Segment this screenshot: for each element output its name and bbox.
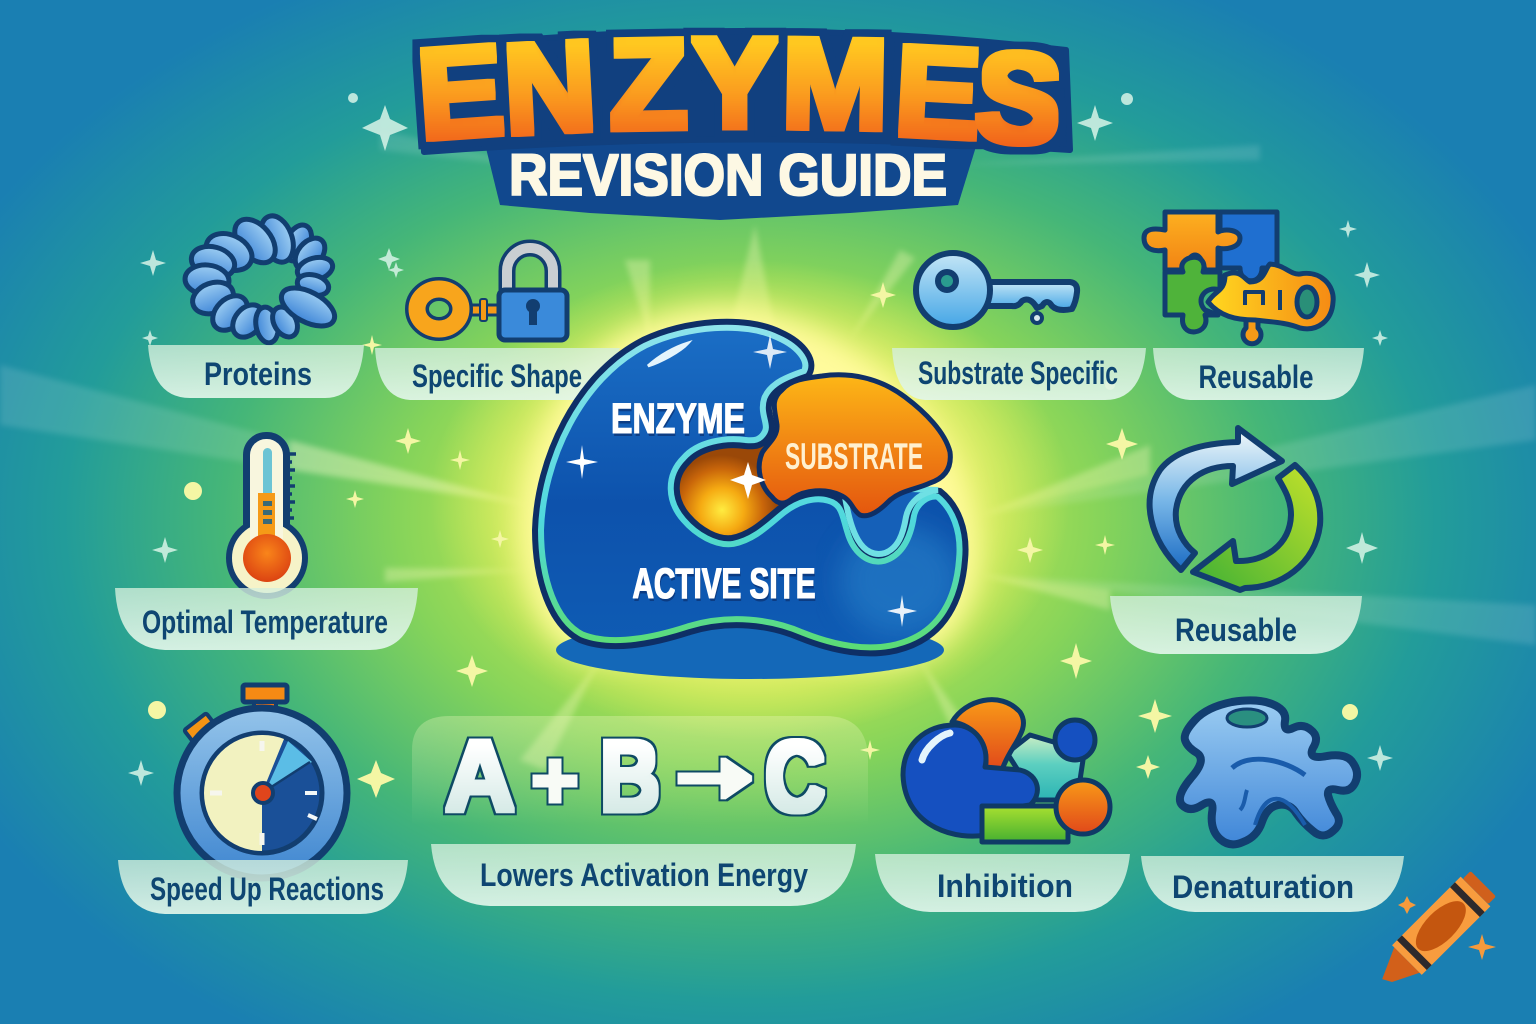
sparkles bbox=[128, 93, 1393, 786]
equation bbox=[445, 721, 825, 833]
shadow bbox=[556, 621, 944, 679]
icon: inhibition bbox=[903, 700, 1110, 842]
label: Speed Up Reactions bbox=[118, 860, 408, 914]
label: Reusable top bbox=[1153, 348, 1364, 400]
label: Specific Shape: Specific Shape bbox=[412, 358, 582, 394]
label: Speed Up Reactions: Speed Up Reactions bbox=[150, 871, 384, 907]
icon: protein coil bbox=[184, 211, 341, 345]
subtitle: REVISION GUIDE bbox=[509, 143, 947, 208]
central enzyme diagram bbox=[535, 322, 966, 679]
label: Optimal Temperature: Optimal Temperature bbox=[142, 604, 388, 640]
near-centre rays bbox=[290, 225, 1150, 780]
enzyme rim bbox=[535, 322, 966, 653]
icon: denatured splat bbox=[1180, 700, 1357, 844]
label: Reusable top: Reusable bbox=[1198, 359, 1314, 395]
substrate bbox=[759, 375, 950, 516]
panel backing bbox=[412, 716, 868, 825]
enzyme outline bbox=[535, 322, 966, 653]
reaction panel bbox=[412, 716, 868, 833]
icon: recycle arrows bbox=[1150, 428, 1320, 590]
icon: crayon bbox=[1370, 869, 1498, 997]
lock shackle bbox=[507, 248, 553, 295]
label: Proteins: Proteins bbox=[204, 356, 312, 392]
label: Lowers Activation Energy: Lowers Activation Energy bbox=[480, 857, 808, 893]
label: Proteins bbox=[148, 345, 364, 398]
title word: ENZYMES bbox=[413, 12, 1066, 173]
light rays bbox=[0, 130, 1536, 645]
equation: A bbox=[445, 721, 515, 833]
central glow bbox=[430, 260, 1070, 740]
arrow bbox=[680, 760, 750, 797]
icon: stopwatch bbox=[177, 685, 347, 878]
label: Denaturation bbox=[1141, 856, 1404, 912]
label: Substrate Specific bbox=[892, 348, 1146, 400]
label: Optimal Temperature bbox=[115, 588, 418, 650]
sparkles on enzyme bbox=[566, 335, 917, 627]
icon: thermometer bbox=[229, 435, 305, 596]
label: Reusable middle bbox=[1110, 596, 1362, 654]
active site bbox=[677, 440, 800, 538]
label: enzyme: ENZYME bbox=[611, 395, 745, 443]
label: Inhibition bbox=[875, 854, 1130, 912]
title bbox=[413, 12, 1070, 220]
pocket under substrate bbox=[845, 488, 938, 554]
label: Lowers Activation Energy bbox=[431, 844, 856, 906]
equation: B bbox=[600, 721, 660, 833]
subtitle banner bbox=[484, 140, 978, 220]
label: Inhibition: Inhibition bbox=[937, 868, 1073, 904]
icon: blue key bbox=[916, 253, 1077, 327]
label: Substrate Specific: Substrate Specific bbox=[918, 355, 1118, 391]
label: Reusable middle: Reusable bbox=[1175, 612, 1297, 648]
enzyme highlight bbox=[648, 343, 688, 366]
label: Denaturation: Denaturation bbox=[1172, 869, 1354, 905]
label: active site: ACTIVE SITE bbox=[632, 560, 816, 608]
enzyme body bbox=[535, 322, 966, 653]
equation: C bbox=[765, 721, 825, 833]
lock body bbox=[499, 290, 567, 340]
title backing bbox=[421, 31, 1070, 152]
icon: puzzle and key bbox=[1144, 212, 1333, 344]
icon: key and lock bbox=[417, 248, 567, 340]
key bbox=[417, 289, 501, 329]
label: Specific Shape bbox=[375, 348, 620, 400]
label: substrate: SUBSTRATE bbox=[785, 436, 923, 477]
